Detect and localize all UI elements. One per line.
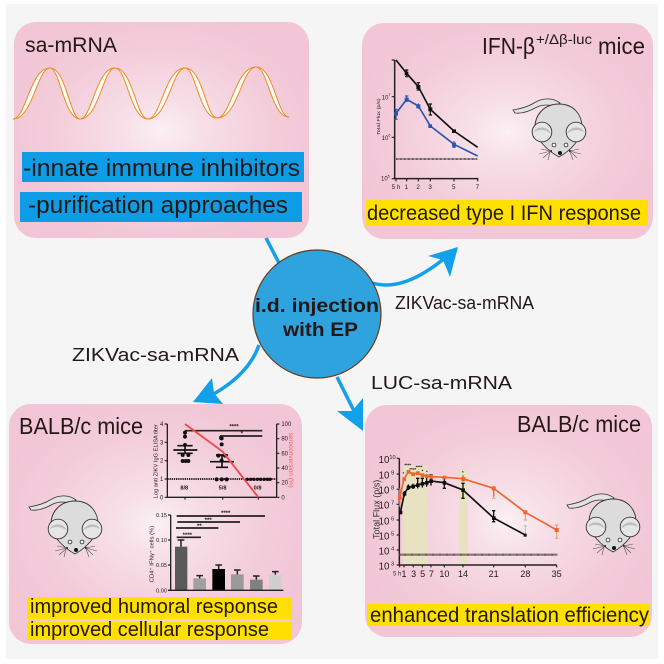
bar chart: CD4 IFN-gamma cells: ** (197, 524, 202, 530)
line chart: total flux over days: 5 (391, 531, 394, 537)
line chart: total flux over days: **** (416, 464, 423, 469)
line chart: total flux over days: 14 (458, 569, 468, 579)
line chart: total flux IFN-beta: 10 (382, 136, 389, 142)
dot plot: ELISA titer and seroconversion: 0 (281, 495, 285, 501)
line chart: total flux over days: 10 (439, 569, 449, 579)
line chart: total flux IFN-beta: 3 (428, 184, 432, 191)
dot plot: ELISA titer and seroconversion: 2 (160, 459, 164, 465)
bar chart: CD4 IFN-gamma cells: 0.10 (156, 538, 167, 544)
center circle: i.d. injection with EP (253, 250, 381, 378)
icon: mouse (29, 496, 102, 557)
line chart: total flux over days: 10 (379, 561, 389, 572)
line chart: total flux over days: 10 (379, 546, 389, 557)
line chart: total flux IFN-beta (376, 60, 480, 191)
arrow: sa-mRNA panel to injection (266, 238, 279, 263)
dot plot: ELISA titer and seroconversion: 0 (160, 495, 164, 501)
line chart: total flux IFN-beta: 6 (388, 134, 390, 138)
label bar: purification approaches: -purification approaches (28, 192, 288, 219)
line chart: total flux over days: 3 (411, 569, 416, 579)
dot plot: ELISA titer and seroconversion (154, 422, 293, 501)
panel: IFN-beta mice (362, 23, 653, 239)
icon: mouse (567, 494, 640, 555)
line chart: total flux over days: 10 (379, 470, 389, 481)
line chart: total flux over days: 5 h (393, 571, 401, 577)
bar chart: CD4 IFN-gamma cells (148, 511, 283, 594)
line chart: total flux over days: 7 (429, 569, 434, 579)
dot plot: ELISA titer and seroconversion: 100 (281, 422, 292, 428)
line chart: total flux IFN-beta: 7 (388, 93, 390, 97)
label: ZIKVac-sa-mRNA left: ZIKVac-sa-mRNA (72, 345, 239, 365)
dot plot: ELISA titer and seroconversion: 60 (281, 451, 289, 457)
icon: mouse (513, 99, 586, 160)
bar chart: CD4 IFN-gamma cells: **** (183, 533, 193, 539)
line chart: total flux over days: 10 (389, 455, 396, 461)
line chart: total flux over days: 21 (489, 569, 499, 579)
line chart: total flux over days: 9 (391, 470, 394, 476)
line chart: total flux over days: 35 (552, 569, 562, 579)
arrow: injection to translation panel (337, 377, 363, 431)
label bar: enhanced translation efficiency: enhanced translation efficiency (370, 604, 649, 627)
line chart: total flux over days: * (422, 468, 424, 473)
label: LUC-sa-mRNA: LUC-sa-mRNA (371, 373, 512, 393)
label bar: improved cellular response: improved cellular response (30, 619, 269, 641)
line chart: total flux over days: 5 (420, 569, 425, 579)
dot plot: ELISA titer and seroconversion: Log anti ZIKV IgG ELISA titer (154, 424, 160, 498)
arrow: injection to humoral panel (193, 345, 259, 404)
line chart: total flux over days: 7 (391, 501, 394, 507)
bar chart: CD4 IFN-gamma cells: 0.00 (156, 588, 167, 594)
dot plot: ELISA titer and seroconversion: 0/8 (254, 486, 262, 492)
center circle: i.d. injection with EP: with EP (282, 320, 358, 341)
panel: sa-mRNA (13, 22, 309, 238)
dot plot: ELISA titer and seroconversion: 4 (160, 422, 164, 428)
line chart: total flux over days: 10 (379, 501, 389, 512)
heading: IFN-beta mice: mice (598, 33, 645, 59)
label bar: decreased type I IFN response: decreased type I IFN response (367, 202, 641, 225)
line chart: total flux over days: 8 (391, 486, 394, 492)
bar chart: CD4 IFN-gamma cells: *** (205, 518, 212, 524)
heading: BALB/c mice: BALB/c mice (517, 411, 641, 437)
dot plot: ELISA titer and seroconversion: 5/8 (219, 486, 227, 492)
dot plot: ELISA titer and seroconversion: 40 (281, 466, 289, 472)
line chart: total flux over days: 10 (379, 486, 389, 497)
bar chart: CD4 IFN-gamma cells: **** (221, 511, 231, 517)
line chart: total flux over days: **** (404, 463, 411, 468)
bar chart: CD4 IFN-gamma cells: CD4⁺ IFNγ⁺ cells (%) (148, 526, 155, 582)
line chart: total flux IFN-beta: 7 (476, 184, 480, 191)
line chart: total flux over days: 10 (379, 531, 389, 542)
arrow: injection to IFN-beta panel (372, 247, 458, 285)
line chart: total flux IFN-beta: 5 h (392, 184, 401, 191)
line chart: total flux over days: 1 (401, 569, 406, 579)
line chart: total flux IFN-beta: 1 (405, 184, 409, 191)
line chart: total flux over days: 28 (520, 569, 530, 579)
panel: BALB/c mice humoral and cellular (9, 404, 302, 644)
line chart: total flux IFN-beta: Total Flux (p/s) (376, 98, 382, 135)
heading: IFN-beta mice: IFN-β (482, 33, 535, 59)
line chart: total flux over days: * (462, 470, 464, 475)
dot plot: ELISA titer and seroconversion: 1 (160, 477, 164, 483)
dot plot: ELISA titer and seroconversion: * (241, 432, 244, 438)
dot plot: ELISA titer and seroconversion: 20 (281, 481, 289, 487)
line chart: total flux IFN-beta: 5 (452, 184, 456, 191)
dot plot: ELISA titer and seroconversion: **** (229, 425, 239, 431)
heading: BALB/c mice: BALB/c mice (19, 413, 143, 439)
label: ZIKVac-sa-mRNA right: ZIKVac-sa-mRNA (395, 293, 534, 313)
line chart: total flux over days: 4 (391, 546, 394, 552)
line chart: total flux over days: 10 (379, 455, 389, 466)
heading: IFN-beta mice (482, 31, 645, 59)
heading: sa-mRNA: sa-mRNA (25, 34, 117, 57)
line chart: total flux over days: **** (409, 467, 416, 472)
line chart: total flux over days: 3 (391, 561, 394, 567)
icon: mRNA ribbon wave (13, 67, 289, 119)
line chart: total flux over days: 6 (391, 516, 394, 522)
line chart: total flux IFN-beta: 5 (388, 174, 390, 178)
line chart: total flux over days: * (403, 471, 405, 476)
dot plot: ELISA titer and seroconversion: seroconversion (%) (287, 433, 293, 488)
label bar: improved humoral response: improved humoral response (30, 596, 278, 618)
line chart: total flux over days: Total Flux (p/s) (371, 480, 381, 539)
dot plot: ELISA titer and seroconversion: 80 (281, 437, 289, 443)
line chart: total flux over days (371, 455, 562, 579)
dot plot: ELISA titer and seroconversion: 8/8 (180, 486, 188, 492)
line chart: total flux IFN-beta: 2 (416, 184, 420, 191)
heading: IFN-beta mice: +/Δβ-luc (536, 31, 592, 47)
line chart: total flux over days: 10 (379, 516, 389, 527)
label bar: innate immune inhibitors: -innate immune inhibitors (23, 155, 300, 182)
line chart: total flux IFN-beta: 10 (381, 177, 388, 183)
bar chart: CD4 IFN-gamma cells: 0.15 (156, 513, 167, 519)
bar chart: CD4 IFN-gamma cells: 0.05 (156, 563, 167, 569)
dot plot: ELISA titer and seroconversion: 3 (160, 440, 164, 446)
center circle: i.d. injection with EP: i.d. injection (255, 296, 379, 317)
line chart: total flux over days: * (426, 469, 428, 474)
panel: BALB/c mice translation (365, 405, 652, 637)
line chart: total flux IFN-beta: 10 (382, 95, 389, 101)
